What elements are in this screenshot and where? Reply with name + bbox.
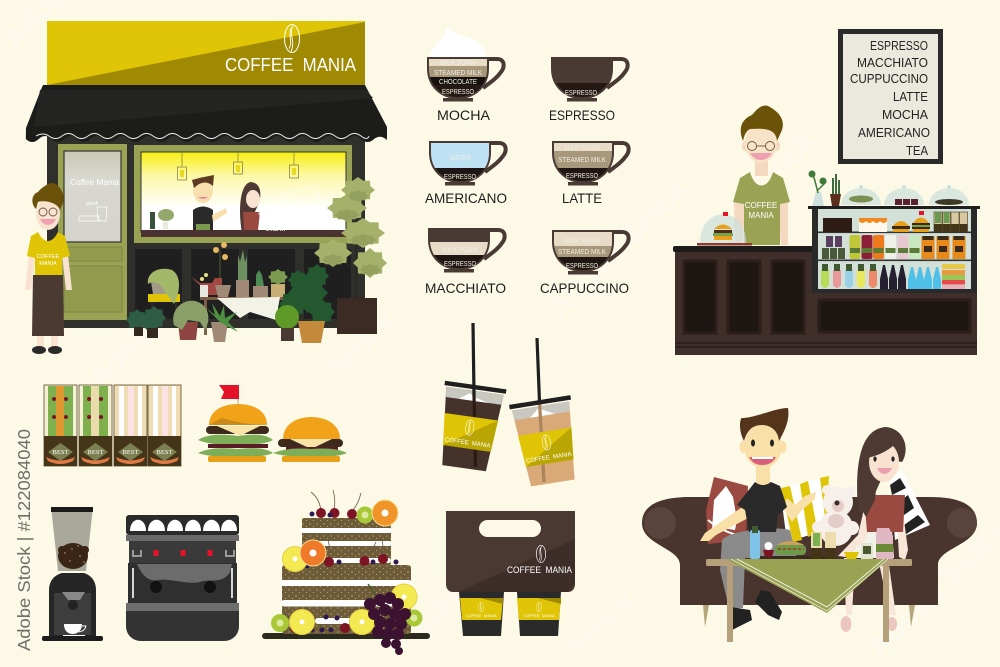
legs and shoes <box>32 336 62 354</box>
cup: cappuccino: ESPRESSO <box>566 261 598 270</box>
man arms <box>700 492 816 541</box>
small white cup <box>64 624 82 634</box>
apron <box>32 275 64 336</box>
stock credit: Adobe Stock | #122084040 <box>14 429 34 651</box>
table with green cloth <box>706 559 912 642</box>
light cup lower straw <box>540 402 544 482</box>
layered cake <box>262 490 430 655</box>
menu board <box>840 32 940 162</box>
arms <box>25 255 72 290</box>
woman <box>838 427 908 632</box>
menu board: AMERICANO <box>858 126 930 140</box>
plants in front of shop <box>126 177 387 343</box>
cup: americano: ESPRESSO <box>444 172 476 181</box>
orange pot <box>298 321 325 343</box>
cup: latte: LATTE <box>562 190 602 206</box>
sandwich 1 <box>44 385 77 466</box>
shirt text <box>37 254 59 267</box>
zigzag pillow <box>890 470 930 540</box>
display shelf 2 <box>822 235 966 259</box>
man legs <box>720 528 797 608</box>
man face <box>749 440 776 465</box>
lower wall panels <box>135 249 351 319</box>
shirt label: MANIA <box>748 211 774 220</box>
man neck <box>756 466 770 486</box>
tree planter <box>337 298 377 334</box>
sandwiches <box>44 385 181 466</box>
woman face <box>873 456 895 474</box>
girl in window <box>240 182 260 232</box>
hair <box>32 183 64 210</box>
cup: mocha <box>427 27 504 123</box>
watermark: Stock <box>562 584 643 665</box>
cup: mocha: CHOCOLATE <box>439 77 477 86</box>
coffee grinder <box>42 507 103 641</box>
shirt label <box>745 201 777 220</box>
cup: americano <box>425 141 507 206</box>
shop sign: COFFEE MANIA <box>225 55 356 75</box>
display case frame <box>808 206 980 293</box>
menu board: MACCHIATO <box>857 56 928 70</box>
green shirt <box>733 172 790 245</box>
hair <box>741 106 783 141</box>
counter body <box>673 246 977 355</box>
fern in red pot <box>173 301 208 340</box>
cup: macchiato <box>425 228 506 296</box>
coffee recipe cups <box>425 27 629 296</box>
shop storefront <box>26 21 387 343</box>
shop sign <box>47 21 365 85</box>
woman hair front <box>866 428 905 462</box>
woman arms <box>838 500 908 560</box>
head <box>36 198 60 230</box>
woman skirt and legs <box>840 532 897 632</box>
dark cup lid and band: COFFEE MANIA <box>444 436 492 450</box>
door: Coffee Mania <box>70 177 119 187</box>
small dark plants <box>126 306 166 338</box>
watermark: Adobe Stock <box>382 512 535 665</box>
coffee beans <box>58 543 89 569</box>
best labels <box>53 449 172 456</box>
arms <box>734 200 788 245</box>
dark cup straw <box>473 323 474 395</box>
single burger <box>273 417 347 462</box>
cup: latte: STEAMED MILK <box>558 155 606 164</box>
citrus slices <box>271 500 422 634</box>
employee in front of shop <box>25 183 72 354</box>
cake bottom tier <box>280 565 412 634</box>
best labels: BEST <box>53 449 68 456</box>
glasses <box>39 208 57 216</box>
round bush pot <box>281 328 294 341</box>
smile <box>40 219 56 225</box>
light cup lid and band: COFFEE MANIA <box>526 451 573 465</box>
best labels: BEST <box>123 449 138 456</box>
watermark: Stock <box>322 304 403 385</box>
cup: latte: ESPRESSO <box>566 171 598 180</box>
cup: mocha: ESPRESSO <box>442 87 474 96</box>
door <box>58 144 127 320</box>
cherries <box>290 490 398 633</box>
takeaway carrier: COFFEE MANIA <box>507 565 573 576</box>
barista in window <box>192 175 227 230</box>
menu board: ESPRESSO <box>870 39 928 53</box>
menu board: CUPPUCCINO <box>850 72 928 86</box>
carried cups <box>459 592 561 636</box>
sandwich 2 <box>79 385 112 466</box>
man <box>700 408 816 633</box>
barista behind counter <box>697 106 790 246</box>
cup: americano: WATER <box>449 153 471 162</box>
spiky plant in tan pot <box>205 303 238 342</box>
cup: espresso: ESPRESSO <box>565 88 597 97</box>
display shelf 1 <box>823 211 968 232</box>
cup: macchiato: MACCHIATO <box>425 280 506 296</box>
double burger <box>198 385 273 462</box>
cup: mocha: STEAMED MILK <box>434 68 482 77</box>
window: thank <box>266 224 287 233</box>
dark cup lid and band <box>436 381 506 453</box>
cake plate <box>262 633 430 639</box>
sandwich 3 <box>114 385 147 466</box>
man hair <box>740 408 788 441</box>
shirt label: COFFEE <box>745 201 777 210</box>
awning <box>26 85 387 142</box>
menu board: TEA <box>906 144 929 158</box>
round bush <box>275 305 299 329</box>
dark cup lower straw <box>474 395 476 467</box>
woman hair strand <box>861 470 877 517</box>
carried cups: COFFEE MANIA <box>465 613 497 618</box>
dark cup body <box>435 387 504 472</box>
woman red top <box>864 495 905 532</box>
cake top tier <box>300 518 392 565</box>
items on table <box>750 526 893 559</box>
carried cups: COFFEE MANIA <box>523 613 555 618</box>
sandwich 4 <box>148 385 181 466</box>
woman head <box>869 442 899 482</box>
iced coffee dark <box>435 323 506 472</box>
shirt text: COFFEE <box>37 254 59 260</box>
watermark: Adobe Stock <box>82 242 235 395</box>
watermark: Stock <box>742 124 823 205</box>
potted plant in window <box>150 209 174 229</box>
menu board: LATTE <box>893 90 928 104</box>
window: LATTE <box>258 207 285 217</box>
flowers and table <box>190 242 288 335</box>
man head <box>740 424 786 468</box>
cup: macchiato: ESPRESSO <box>444 259 476 268</box>
iced coffee light <box>509 338 581 488</box>
man shoes <box>727 590 782 633</box>
watermark: Adobe Stock <box>542 172 695 325</box>
counter and display case <box>673 170 980 355</box>
door: good! <box>86 201 99 207</box>
espresso machine <box>126 515 239 641</box>
cup: espresso: ESPRESSO <box>549 107 615 123</box>
window <box>134 145 352 243</box>
man black shirt <box>737 482 787 532</box>
cup: macchiato: MILK FOAM <box>442 245 478 254</box>
sofa <box>642 497 977 627</box>
smile <box>750 153 772 160</box>
cup: cappuccino: MILK FOAM <box>564 236 600 245</box>
best labels: BEST <box>157 449 172 456</box>
neck <box>755 158 768 176</box>
cup: espresso <box>549 57 628 123</box>
dark green bush <box>279 264 335 325</box>
tree <box>314 177 387 300</box>
light cup body <box>512 401 581 488</box>
shop wall <box>47 136 365 328</box>
teddy bear <box>812 485 859 546</box>
cup: mocha: MOCHA <box>437 107 491 123</box>
takeaway carrier <box>446 511 575 636</box>
cup: cappuccino: STEAMED MILK <box>558 247 606 256</box>
white cups row <box>130 520 237 531</box>
best labels: BEST <box>88 449 103 456</box>
cup: cappuccino: CAPPUCCINO <box>540 280 629 296</box>
glasses <box>748 142 774 150</box>
shirt <box>27 232 70 275</box>
couple on sofa scene <box>642 408 977 642</box>
stool plant <box>148 269 180 316</box>
light cup straw <box>537 338 540 402</box>
burger under dome <box>697 212 752 246</box>
woman hair back <box>857 427 906 517</box>
cup: latte: MILK FOAM <box>564 143 600 152</box>
cup: cappuccino <box>540 230 629 296</box>
display shelf 3 <box>821 264 965 289</box>
grapes <box>364 584 411 655</box>
cup: americano: AMERICANO <box>425 190 507 206</box>
light cup lid and band <box>509 395 580 468</box>
striped pillow <box>780 476 829 542</box>
menu board: MOCHA <box>882 108 929 122</box>
shirt text: MANIA <box>39 261 57 267</box>
pillow with horse <box>706 477 748 544</box>
head <box>742 123 780 163</box>
cup: mocha: MILK FOAM <box>440 58 476 67</box>
items on top of case <box>808 170 969 206</box>
cup: latte <box>552 141 629 206</box>
